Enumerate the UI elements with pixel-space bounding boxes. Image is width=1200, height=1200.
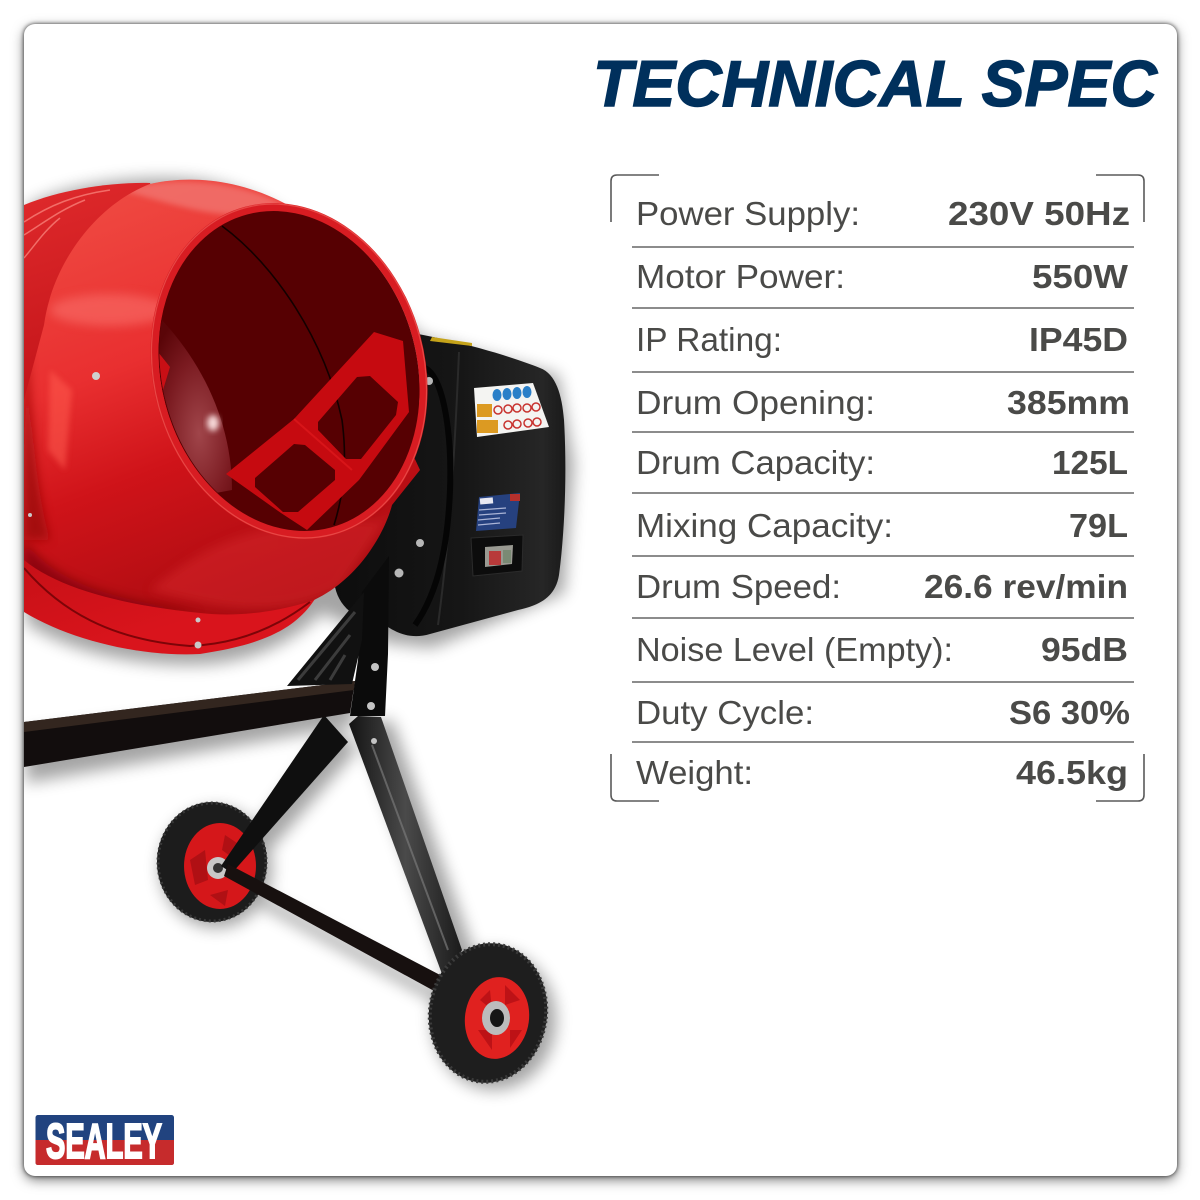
row: power supply: 230V 50Hz — [948, 195, 1130, 232]
red paddle peek — [159, 354, 170, 390]
cone highlights — [24, 182, 400, 620]
rating plate — [476, 493, 520, 531]
row: weight — [636, 754, 1128, 791]
rear flange — [24, 183, 320, 654]
row: duty cycle: S6 30% — [1009, 694, 1130, 731]
upright post — [350, 556, 389, 716]
row: power supply: Power Supply: — [636, 195, 860, 232]
bolts on housing — [394, 377, 433, 578]
row: drum capacity: 125L — [1052, 444, 1128, 481]
horizontal beam — [24, 681, 355, 767]
row: duty cycle: Duty Cycle: — [636, 694, 814, 731]
drum rim — [150, 203, 428, 539]
row: motor power: Motor Power: — [636, 258, 845, 295]
row: noise level: 95dB — [1041, 631, 1128, 668]
row: power supply — [636, 195, 1130, 232]
safety sticker — [474, 383, 549, 437]
inner seam — [222, 226, 344, 525]
gusset bracket — [287, 610, 360, 686]
product photo: cement mixer — [24, 173, 574, 1091]
row: drum opening — [636, 384, 1130, 421]
on off switch — [471, 535, 523, 576]
left wheel — [157, 802, 267, 922]
row: drum opening: 385mm — [1007, 384, 1130, 421]
row: drum speed: Drum Speed: — [636, 568, 841, 605]
row: drum speed — [636, 568, 1128, 605]
row: IP rating: IP45D — [1029, 321, 1128, 358]
row: motor power: 550W — [1032, 258, 1129, 295]
row: weight: Weight: — [636, 754, 753, 791]
specification table — [611, 175, 1144, 801]
inner dome reflection — [160, 331, 232, 492]
row: drum capacity: Drum Capacity: — [636, 444, 875, 481]
motor housing — [335, 334, 565, 636]
row: mixing capacity — [636, 507, 1128, 544]
right wheel — [428, 942, 548, 1084]
row: noise level — [636, 631, 1128, 668]
row: drum speed: 26.6 rev/min — [924, 568, 1128, 605]
row: weight: 46.5kg — [1016, 754, 1128, 791]
drum cone body — [24, 180, 420, 614]
row: mixing capacity: 79L — [1069, 507, 1128, 544]
row: motor power — [636, 258, 1129, 295]
soft drop shadow — [26, 178, 574, 1090]
cross bar — [224, 864, 442, 992]
mixing drum — [24, 173, 463, 654]
row: IP rating — [636, 321, 1128, 358]
row: IP rating: IP Rating: — [636, 321, 782, 358]
frame brackets — [611, 175, 1144, 801]
drum interior — [158, 211, 420, 531]
logo: Sealey: SEALEY — [46, 1115, 162, 1169]
title: TECHNICAL SPEC — [593, 47, 1158, 120]
mixing blade — [226, 332, 409, 530]
row: noise level: Noise Level (Empty): — [636, 631, 953, 668]
row: drum capacity — [636, 444, 1128, 481]
row: drum opening: Drum Opening: — [636, 384, 875, 421]
rear ribbed leg — [349, 716, 462, 982]
cone bolt — [92, 372, 100, 380]
stand frame — [24, 556, 462, 992]
row: duty cycle — [636, 694, 1130, 731]
logo: Sealey — [36, 1115, 174, 1169]
front support leg — [221, 715, 348, 873]
flange bolts — [28, 513, 202, 648]
row: mixing capacity: Mixing Capacity: — [636, 507, 893, 544]
